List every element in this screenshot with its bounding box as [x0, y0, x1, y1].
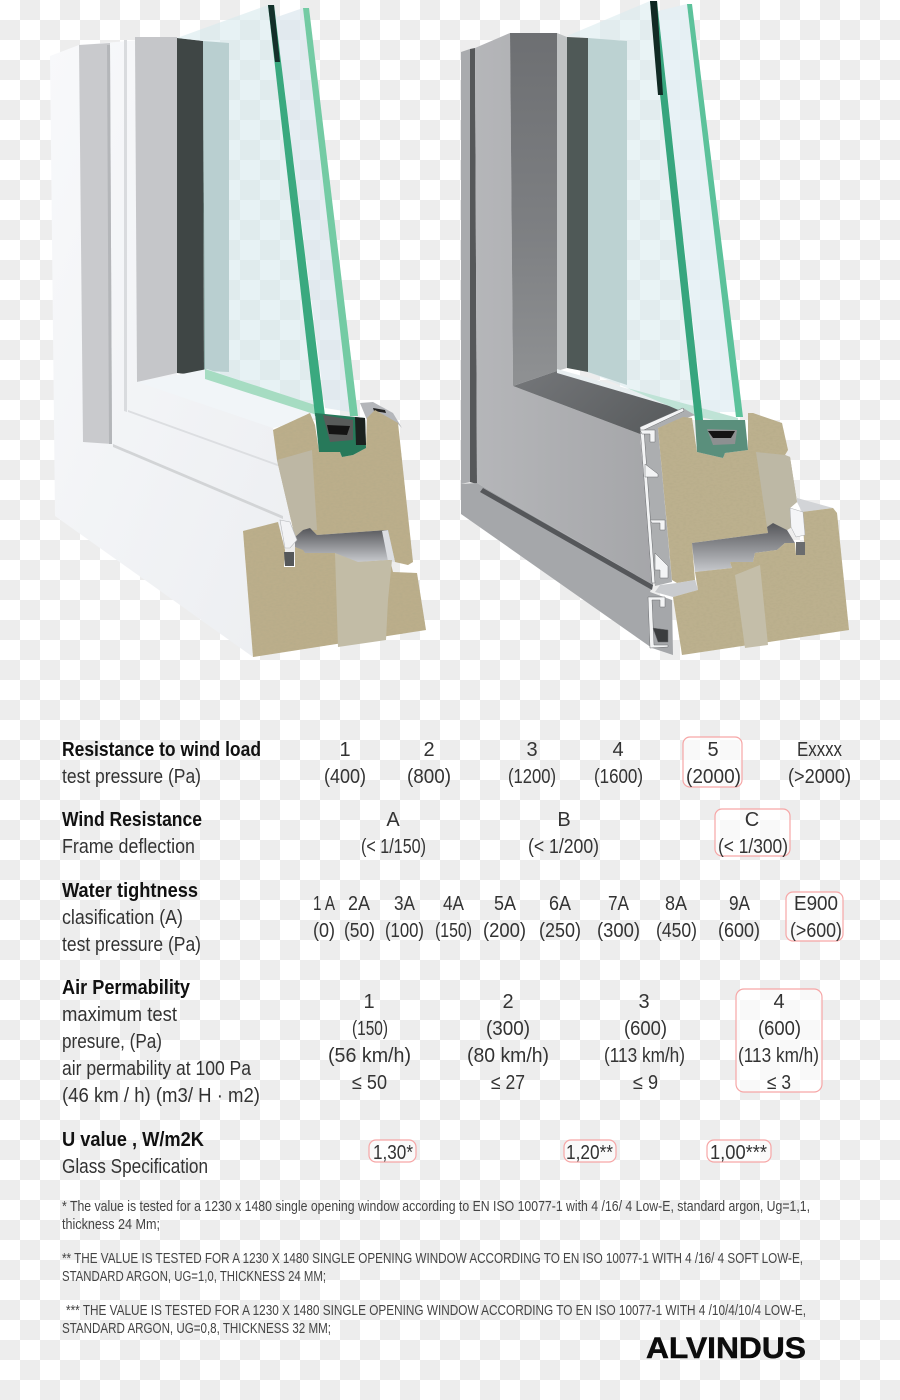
heading: maximum test [62, 1004, 177, 1026]
values [324, 739, 851, 788]
values: 3A [394, 893, 416, 915]
sash to frame gap [692, 523, 795, 572]
heading: presure, (Pa) [62, 1031, 162, 1053]
values: 1 A [313, 893, 335, 915]
values: (1200) [508, 766, 556, 788]
thermal aluminium profile [640, 408, 684, 648]
values: 6A [549, 893, 572, 915]
values: (150) [352, 1018, 388, 1040]
wood section: sash [658, 413, 797, 583]
profile body [640, 408, 695, 586]
values: (400) [324, 766, 366, 788]
row: water tightness [62, 880, 843, 956]
values: 2 [423, 739, 435, 761]
heading: Resistance to wind load [62, 739, 261, 761]
badge: 1,00: 1,00*** [710, 1142, 767, 1164]
bottom frame strip [461, 483, 673, 655]
values: 7A [608, 893, 630, 915]
highlight: class 5 [683, 737, 742, 787]
light gap strip [655, 580, 698, 597]
glass panes [567, 1, 700, 410]
values: 1 [363, 991, 375, 1013]
values: 9A [729, 893, 751, 915]
values: (600) [758, 1018, 801, 1040]
values: 2A [348, 893, 371, 915]
glass pane front [177, 5, 315, 405]
heading: air permability at 100 Pa [62, 1058, 252, 1080]
aluminium clip [280, 520, 297, 548]
gray rebate [79, 43, 112, 444]
values: Exxxx [797, 739, 842, 761]
glazing bead and spacer [315, 413, 366, 457]
values: 4A [443, 893, 465, 915]
values: 5 [707, 739, 719, 761]
values: (800) [407, 766, 451, 788]
heading [62, 880, 201, 956]
values: (300) [486, 1018, 530, 1040]
footnotes: thickness 24 Mm; [62, 1216, 160, 1233]
heading: U value , W/m2K [62, 1129, 204, 1151]
highlight: class 4 [736, 989, 822, 1092]
inner reveal [135, 37, 177, 382]
values: 3 [526, 739, 538, 761]
values: 4 [773, 991, 785, 1013]
values: 3 [638, 991, 650, 1013]
values: (>2000) [788, 766, 851, 788]
deep reveal [510, 33, 557, 386]
badge: 1,20: 1,20** [566, 1142, 613, 1164]
values: B [557, 809, 571, 831]
values: (0) [313, 920, 335, 942]
sash to frame gap [295, 528, 395, 562]
logo: Alvindus: ALVINDUS [646, 1332, 806, 1365]
values: (1600) [594, 766, 643, 788]
side strip [461, 49, 470, 484]
values: ≤ 9 [633, 1072, 658, 1094]
sill [513, 371, 683, 434]
values: (< 1/150) [361, 836, 426, 858]
row: air permability [62, 977, 822, 1107]
values: C [745, 809, 759, 831]
image: white wood window profile [50, 5, 426, 657]
heading: Wind Resistance [62, 809, 202, 831]
wood section: frame [673, 508, 849, 655]
values: 5A [494, 893, 517, 915]
heading: test pressure (Pa) [62, 766, 201, 788]
values [361, 809, 788, 858]
light strip [557, 33, 567, 371]
row: wind resistance [62, 809, 790, 858]
heading [62, 809, 202, 858]
values [328, 991, 819, 1094]
heading: (46 km / h) (m3/ H · m2) [62, 1085, 260, 1107]
values: (150) [435, 920, 472, 942]
footnotes [62, 1198, 810, 1337]
tinted spacer [588, 38, 627, 385]
values: (100) [385, 920, 424, 942]
wood section: sash [273, 410, 413, 565]
white clip [790, 508, 805, 537]
image: aluminium clad wood window profile [461, 1, 849, 655]
values: (< 1/200) [528, 836, 599, 858]
drip cap [360, 402, 402, 428]
heading: clasification (A) [62, 907, 183, 929]
heading: Water tightness [62, 880, 198, 902]
values: 1 [339, 739, 351, 761]
heading: Glass Specification [62, 1156, 208, 1178]
highlight: class C [715, 809, 790, 856]
values: ≤ 50 [352, 1072, 387, 1094]
row: u value [62, 1129, 771, 1178]
dark band [567, 37, 588, 372]
heading [62, 977, 260, 1107]
heading: Frame deflection [62, 836, 195, 858]
values: (113 km/h) [604, 1045, 685, 1067]
dark band [177, 38, 204, 376]
values: E900 [794, 893, 838, 915]
heading [62, 1129, 208, 1178]
glazing bead and spacer [695, 420, 748, 458]
values: 2 [502, 991, 514, 1013]
values: (200) [483, 920, 526, 942]
values: (>600) [790, 920, 842, 942]
badge: 1,30: 1,30* [373, 1142, 413, 1164]
values: (600) [624, 1018, 667, 1040]
footnotes: STANDARD ARGON, UG=1,0, THICKNESS 24 MM; [62, 1268, 326, 1285]
values: (< 1/300) [718, 836, 788, 858]
values [313, 893, 842, 942]
tinted spacer [203, 41, 229, 372]
values: 8A [665, 893, 688, 915]
values: (50) [344, 920, 375, 942]
values: ≤ 3 [767, 1072, 791, 1094]
values: (56 km/h) [328, 1045, 411, 1067]
values: A [386, 809, 400, 831]
front face [475, 33, 653, 585]
footnotes: STANDARD ARGON, UG=0,8, THICKNESS 32 MM; [62, 1320, 331, 1337]
values: 4 [612, 739, 624, 761]
heading: Air Permability [62, 977, 191, 999]
values: (113 km/h) [738, 1045, 819, 1067]
highlight: class E900 [786, 892, 843, 941]
heading [62, 739, 261, 788]
row: resistance to wind load [62, 737, 851, 788]
values: ≤ 27 [491, 1072, 525, 1094]
values: (250) [539, 920, 581, 942]
values: (300) [597, 920, 640, 942]
values: (600) [718, 920, 760, 942]
values: (450) [656, 920, 697, 942]
sill top [137, 369, 315, 428]
values: (80 km/h) [467, 1045, 549, 1067]
heading: test pressure (Pa) [62, 934, 201, 956]
values: (2000) [686, 766, 741, 788]
wood section: frame [243, 522, 426, 657]
